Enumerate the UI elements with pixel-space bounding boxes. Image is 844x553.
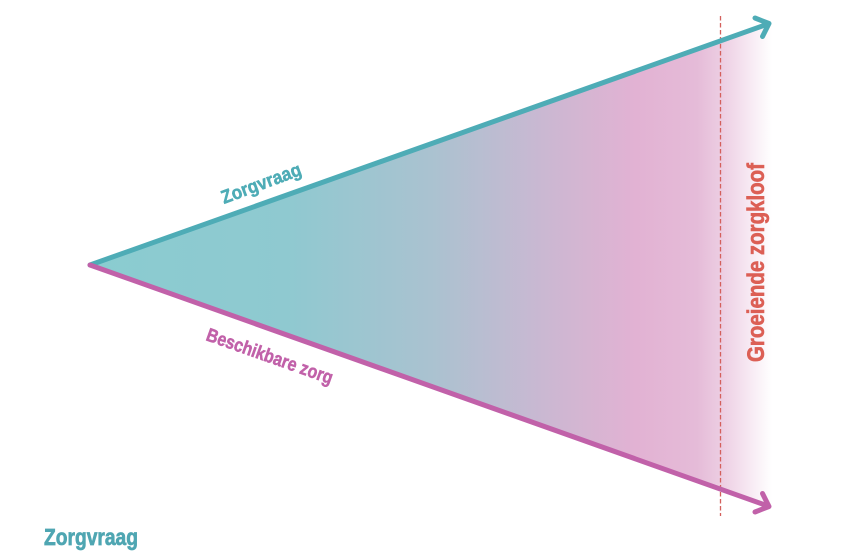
caption: Zorgvraag: Zorgvraag: [44, 524, 138, 550]
label: Zorgvraag on arrow: Zorgvraag: [218, 160, 304, 209]
label: Groeiende zorgkloof: Groeiende zorgkloof: [743, 162, 770, 362]
arrow: available care: [90, 265, 769, 512]
care gap gradient triangle: [90, 23, 772, 507]
dashed line: care gap marker: [720, 16, 722, 516]
label: Beschikbare zorg on arrow: Beschikbare zorg: [203, 325, 336, 389]
arrow: care demand: [90, 18, 769, 265]
